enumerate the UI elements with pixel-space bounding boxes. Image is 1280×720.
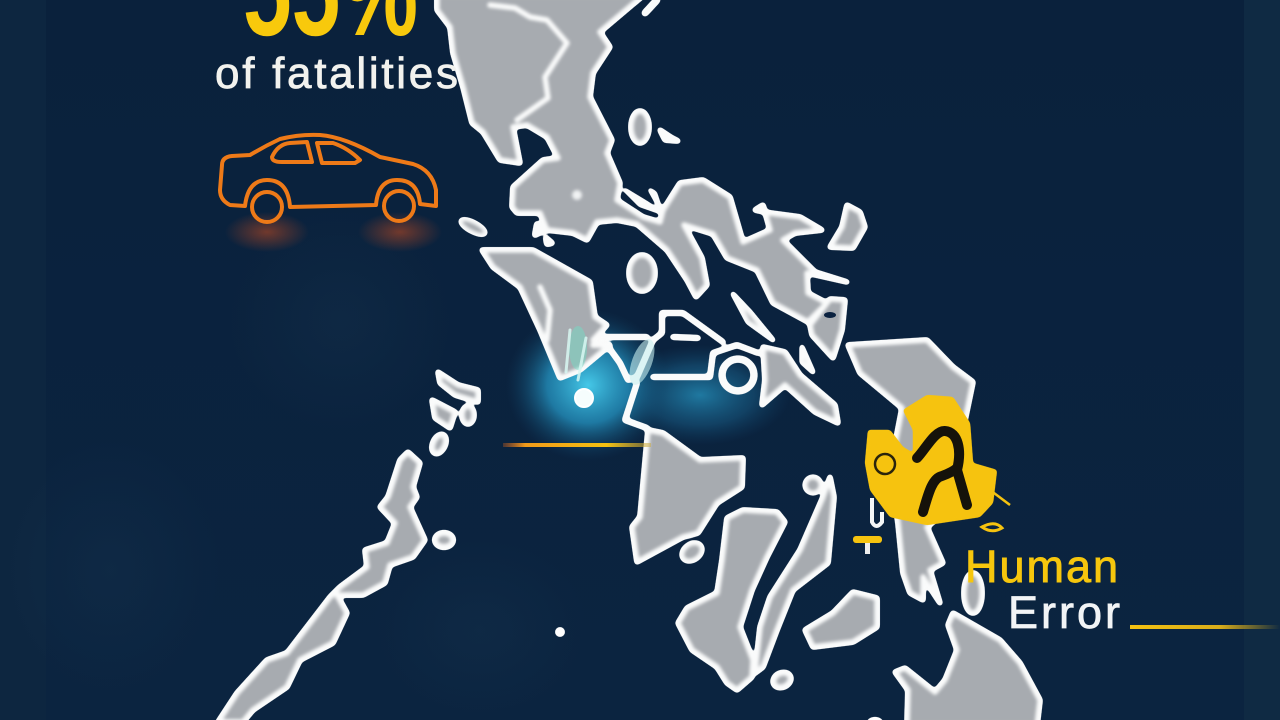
car wheel	[722, 359, 754, 391]
label: Human: Human	[965, 541, 1118, 592]
car left wheel	[252, 192, 282, 222]
islets: Calamian group	[438, 372, 478, 402]
islet: Dinagat	[964, 573, 982, 613]
cyan highlight around crash	[566, 326, 660, 407]
Manila marker dot	[572, 190, 582, 200]
islet: Cuyo	[429, 432, 449, 456]
icon: orange car	[220, 135, 442, 252]
car body	[593, 313, 758, 428]
yellow blob	[865, 395, 997, 525]
yellow loop	[982, 524, 1002, 531]
islet near Polillo	[660, 130, 678, 141]
car left window	[272, 142, 312, 162]
islet west of Luzon	[458, 216, 488, 238]
black figure strokes	[917, 431, 967, 512]
islet dark spot	[824, 312, 836, 318]
Mindoro inner line	[540, 287, 550, 340]
yellow leader line right	[1130, 625, 1280, 629]
island: Negros	[678, 510, 785, 690]
islet: east of Palawan	[435, 533, 453, 547]
island: Samar and Leyte	[848, 340, 973, 603]
white channel strips	[625, 190, 660, 212]
island: Catanduanes	[830, 205, 865, 248]
islet: Siquijor	[771, 670, 793, 690]
island: Burias	[733, 294, 773, 340]
yellow leader line left	[503, 443, 651, 447]
car right wheel	[384, 191, 414, 221]
car right window	[317, 143, 360, 163]
yellow spark	[990, 490, 1010, 505]
Luzon inner coastline	[490, 5, 567, 120]
crash car icon outline on map	[593, 313, 758, 428]
island: Masbate	[762, 347, 838, 423]
figure head ring	[875, 454, 895, 474]
islets south of Manila	[535, 224, 552, 244]
white stem	[865, 543, 870, 554]
island: Polillo	[631, 111, 649, 143]
island: Mindoro	[482, 250, 610, 378]
island: Ticao	[802, 347, 813, 372]
islet north of Cebu	[805, 477, 821, 493]
islet dot	[555, 627, 565, 637]
island: Luzon	[437, 0, 847, 322]
island: Marinduque	[629, 255, 655, 291]
island: Mindanao	[895, 613, 1040, 720]
white hanging loop	[872, 498, 882, 526]
yellow small bar	[853, 536, 882, 543]
blue glow behind crash icon	[506, 309, 790, 461]
map of the Philippines	[218, 0, 1040, 720]
label: Error: Error	[1008, 587, 1120, 638]
islet south of Mindanao	[867, 717, 883, 720]
icon: yellow human error figure	[853, 395, 1010, 554]
car outline	[220, 135, 436, 207]
car underglow	[225, 212, 442, 252]
island: Biliran area	[810, 299, 845, 358]
islet: Calamian south	[432, 400, 455, 428]
island: Palawan	[218, 452, 425, 720]
islet: Calamian east	[462, 406, 474, 424]
text: of fatalities: of fatalities	[215, 49, 458, 98]
islets: Guimaras	[678, 539, 706, 565]
islet north	[645, 0, 657, 13]
island: Panay	[632, 430, 743, 562]
island: Bohol	[805, 592, 877, 647]
island: Cebu	[755, 477, 834, 673]
